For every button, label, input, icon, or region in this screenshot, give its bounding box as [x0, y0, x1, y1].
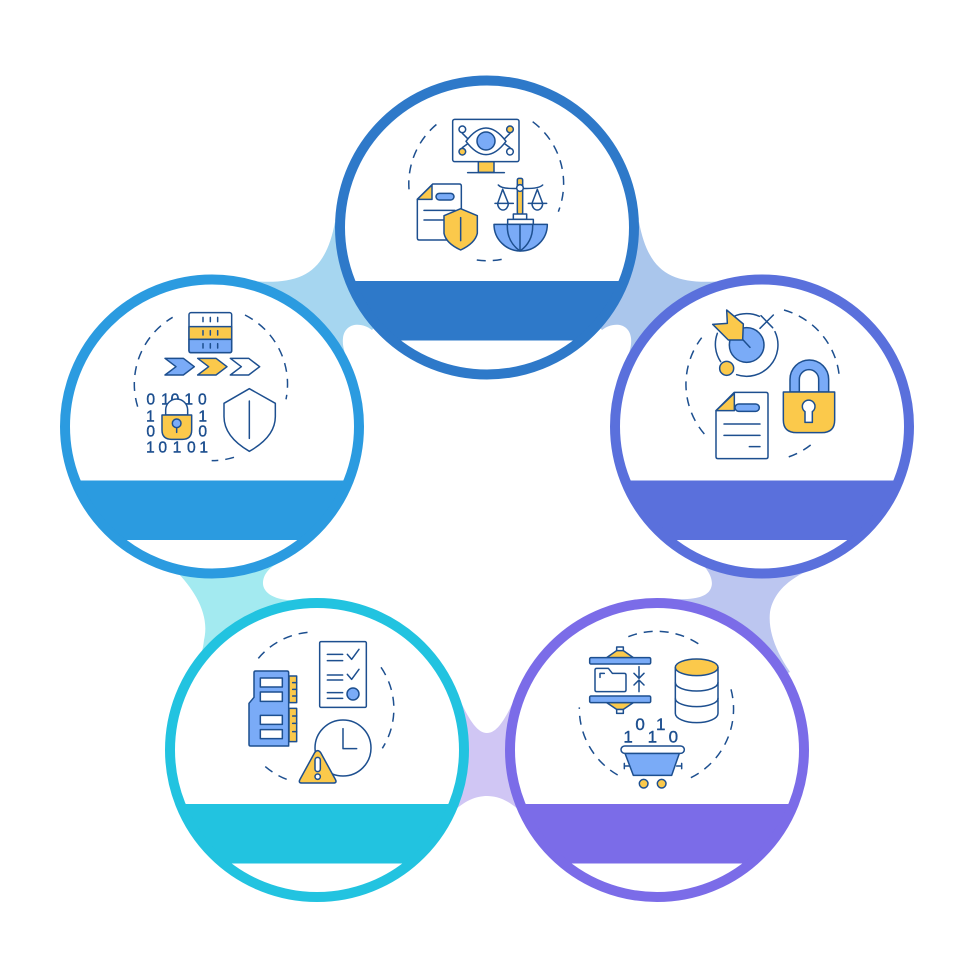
icon: memory card, checklist, clock and warning: [249, 632, 394, 783]
panel: right circle: [605, 280, 925, 574]
panel: bottom right circle: [500, 603, 820, 897]
circle ring: [340, 80, 634, 374]
circle fill: [65, 280, 359, 574]
text band: [526, 804, 788, 864]
icon: server, encrypted data and shield: 1: [146, 408, 155, 425]
icon: server, encrypted data and shield: 0: [171, 391, 180, 408]
icon: server, encrypted data and shield: 1: [146, 440, 155, 457]
text band: [186, 804, 448, 864]
icon: server, encrypted data and shield: 0: [146, 424, 155, 441]
circle ring: [65, 280, 359, 574]
icon: server, encrypted data and shield: 1: [198, 408, 207, 425]
icon: server, encrypted data and shield: [134, 313, 288, 461]
text band: [80, 480, 344, 540]
panel: bottom left circle: [160, 603, 480, 897]
icon: server, encrypted data and shield: 1: [199, 440, 208, 457]
text band: [630, 480, 894, 540]
icon: server, encrypted data and shield: 0: [198, 424, 207, 441]
circle fill: [510, 603, 804, 897]
text band: [356, 281, 618, 340]
icon: server, encrypted data and shield: 1: [161, 391, 170, 408]
panel: top circle: [330, 80, 650, 374]
icon: file compression, database and data cart: 1: [623, 728, 633, 747]
icon: file compression, database and data cart: 1: [656, 715, 665, 734]
connector: top to left: [250, 222, 400, 365]
icon: monitoring, legal document and global law: [409, 119, 564, 261]
icon: server, encrypted data and shield: 0: [198, 391, 207, 408]
connector: top to right: [574, 222, 724, 365]
icon: server, encrypted data and shield: 0: [146, 391, 155, 408]
icon: file compression, database and data cart: 0: [635, 715, 645, 734]
connector: right to bottom right: [675, 530, 805, 700]
circle ring: [510, 603, 804, 897]
icon: server, encrypted data and shield: 0: [158, 440, 167, 457]
icon: server, encrypted data and shield: 0: [187, 440, 196, 457]
circle fill: [615, 280, 909, 574]
panel: left circle: [55, 280, 375, 574]
circle ring: [170, 603, 464, 897]
icon: server, encrypted data and shield: 1: [184, 391, 193, 408]
circle ring: [615, 280, 909, 574]
connector: bottom left to bottom right: [448, 700, 526, 815]
circle fill: [170, 603, 464, 897]
icon: file compression, database and data cart: [579, 631, 734, 788]
icon: server, encrypted data and shield: 1: [173, 440, 181, 457]
circle fill: [340, 80, 634, 374]
icon: file compression, database and data cart: 0: [669, 728, 678, 747]
connector: left to bottom left: [175, 520, 300, 690]
icon: file compression, database and data cart: 1: [648, 728, 657, 747]
icon: target, document and padlock: [686, 310, 839, 459]
